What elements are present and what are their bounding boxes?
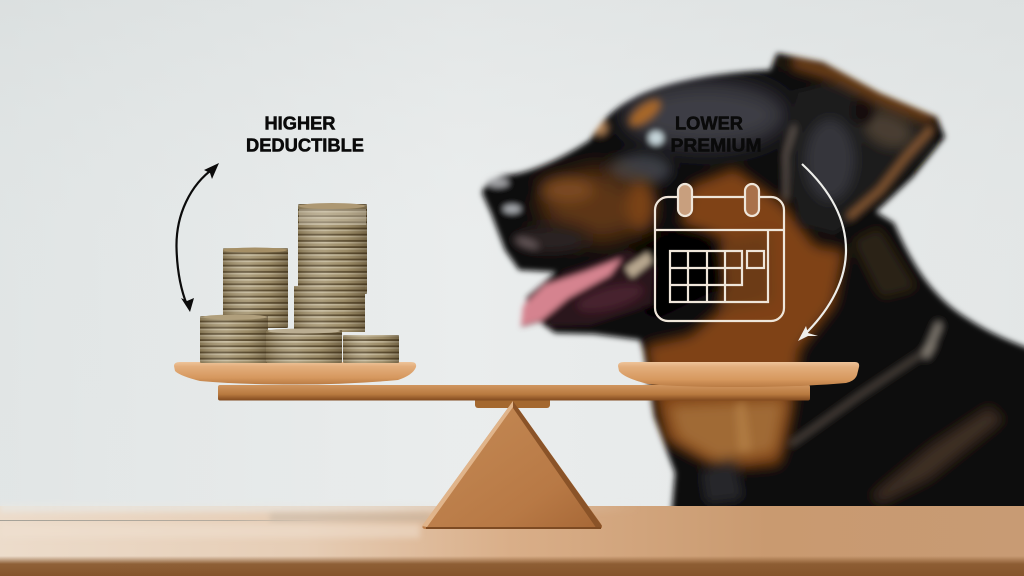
mouth [548,250,655,326]
coin stack tall [294,203,367,332]
ear top tip [774,54,790,70]
coin stack front middle [266,328,342,363]
collar [790,345,935,445]
teeth [625,252,652,278]
back shoulder brown [850,225,920,300]
lower fur patches [870,405,1005,505]
coin stack back left [223,248,288,328]
label: higher deductible: DEDUCTIBLE [246,136,364,156]
label: higher deductible: HIGHER [264,114,336,134]
nose [492,177,532,203]
eye [648,131,664,145]
head grey top [620,79,790,151]
neck tan behind calendar [722,232,772,312]
right plate [618,362,859,387]
eyebrows tan [625,95,665,131]
coin stack front left [200,314,268,363]
scale fulcrum [422,397,602,529]
arrow: left double-headed curve [176,163,219,312]
arrow: right curved down [798,164,846,341]
tongue [521,258,622,326]
dog photo (blurred) [482,53,1024,520]
muzzle brown [535,165,650,245]
upper lip highlight [513,235,541,251]
label: lower premium: PREMIUM [670,136,762,156]
coin stacks [200,203,399,363]
table [0,503,1024,576]
ear interior [785,80,935,235]
ear brown rims [790,60,935,118]
black throat behind calendar [618,232,722,318]
label: lower premium [670,114,762,156]
neck and chest tan [645,168,845,470]
scale beam [218,385,810,400]
lower muzzle dark [512,226,588,254]
label: higher deductible [246,114,364,156]
left plate [174,362,416,384]
label: lower premium: LOWER [675,114,743,134]
icon: calendar [655,184,784,321]
coin stack right [343,335,399,363]
